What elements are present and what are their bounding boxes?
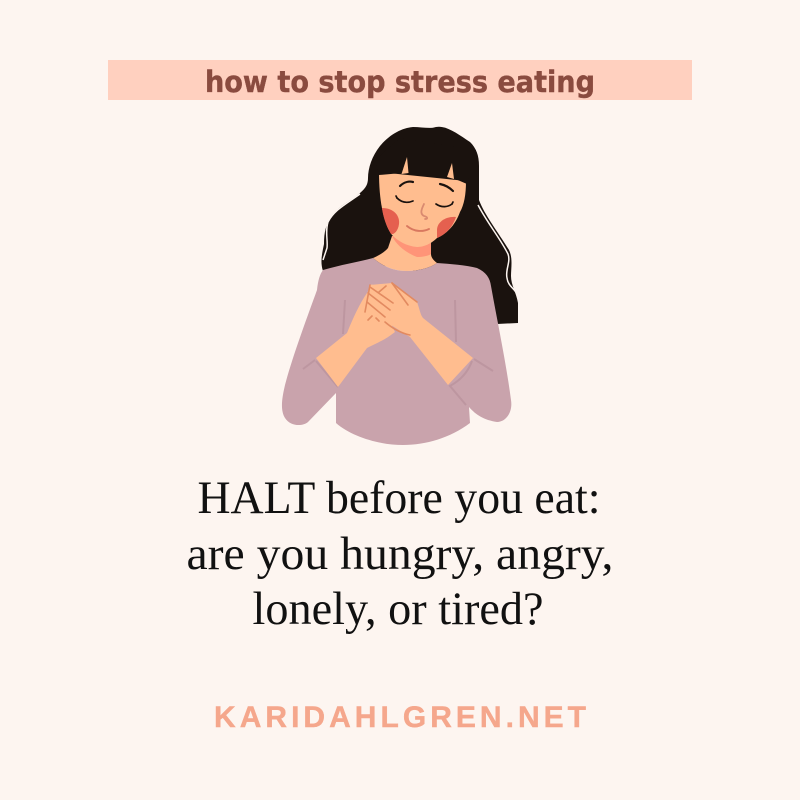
- finger lines: [365, 283, 417, 335]
- blush: [382, 208, 456, 238]
- face: [379, 172, 466, 247]
- heading banner: [108, 60, 692, 100]
- eyebrows: [400, 182, 453, 191]
- bang slits: [402, 157, 454, 179]
- message text: HALT before you eat:: [198, 473, 600, 524]
- nose and mouth: [407, 204, 429, 231]
- hair: [321, 127, 518, 324]
- bangs: [375, 138, 476, 184]
- neck: [373, 236, 437, 271]
- closed eyes: [396, 196, 453, 207]
- neck shadow: [392, 236, 431, 257]
- message text: are you hungry, angry,: [186, 529, 614, 580]
- message text: lonely, or tired?: [252, 584, 544, 635]
- left forearm and hand: [316, 284, 395, 387]
- sleeve folds: [303, 300, 493, 405]
- message text: [186, 473, 614, 635]
- heading banner: how to stop stress eating: [205, 65, 595, 99]
- illustration: woman with hands on heart: [282, 127, 518, 445]
- hair highlights: [323, 194, 517, 294]
- sweater: [282, 258, 511, 445]
- right forearm and hand: [367, 283, 473, 385]
- website footer: KARIDAHLGREN.NET: [214, 701, 586, 734]
